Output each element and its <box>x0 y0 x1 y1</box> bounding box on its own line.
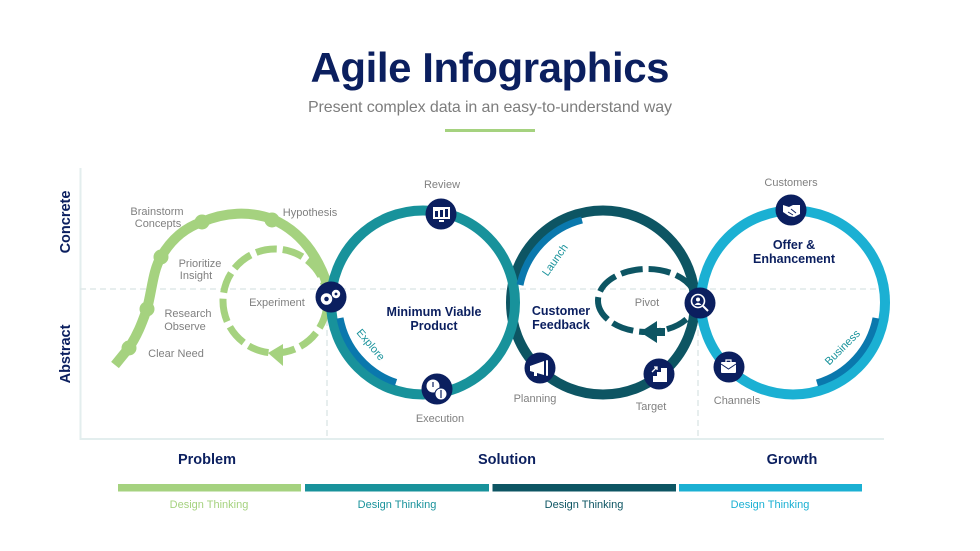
icon: gears <box>316 282 346 312</box>
heading: Minimum Viable Product: Product <box>410 319 458 333</box>
icon: stairs <box>644 358 674 390</box>
legend text: dark: Design Thinking <box>545 499 623 511</box>
label: Prioritize Insight: Prioritize <box>179 258 221 270</box>
chart axes <box>80 168 884 439</box>
legend text: teal: Design Thinking <box>358 499 436 511</box>
label: Target: Target <box>636 401 666 413</box>
icon: magnifier person <box>684 288 716 318</box>
label: Experiment: Experiment <box>249 297 305 309</box>
label: Business: Business <box>823 328 863 368</box>
cyan offer ring <box>701 210 885 394</box>
title underline <box>445 129 535 132</box>
blue arc: business <box>817 318 876 383</box>
label: Clear Need: Clear Need <box>148 348 204 360</box>
icon: handshake <box>776 194 806 226</box>
heading: Customer Feedback: Feedback <box>532 318 590 332</box>
heading: Minimum Viable Product: Minimum Viable <box>387 305 482 319</box>
icon: coins <box>422 374 452 404</box>
legend text: cyan: Design Thinking <box>731 499 809 511</box>
dark customer feedback ring <box>511 210 695 394</box>
label: Prioritize Insight: Insight <box>180 270 212 282</box>
label: Hypothesis: Hypothesis <box>283 207 338 219</box>
green dashed experiment loop with arrow <box>223 249 327 366</box>
heading: Offer and Enhancement: Enhancement <box>753 252 836 266</box>
stage heading: Solution: Solution <box>478 452 536 468</box>
title: Agile Infographics <box>310 44 670 91</box>
label: Execution: Execution <box>416 413 464 425</box>
label: Planning: Planning <box>514 393 556 405</box>
blue arc: launch <box>520 220 582 285</box>
label: Brainstorm Concepts: Concepts <box>135 218 182 230</box>
green problem curve <box>115 212 328 365</box>
label: Research Observe: Observe <box>164 321 206 333</box>
label: Customers: Customers <box>764 177 818 189</box>
legend bar: cyan <box>679 484 862 492</box>
legend text: green: Design Thinking <box>170 499 248 511</box>
heading: Customer Feedback: Customer <box>532 304 590 318</box>
label: Research Observe: Research <box>164 308 212 320</box>
subtitle: Present complex data in an easy-to-understand way <box>308 99 672 116</box>
icon: monitor chart <box>426 198 456 230</box>
legend bar: dark <box>492 484 676 492</box>
label: Explore: Explore <box>354 327 387 363</box>
icon: megaphone <box>524 352 556 384</box>
axis label: Concrete: Concrete <box>58 191 74 253</box>
heading: Offer and Enhancement: Offer & <box>773 238 815 252</box>
teal minimum viable product ring <box>331 210 515 394</box>
icon: briefcase <box>714 352 744 382</box>
legend bar: teal <box>305 484 489 492</box>
dark dashed pivot loop with arrow <box>598 269 696 343</box>
blue arc: explore <box>340 318 396 382</box>
label: Review: Review <box>424 179 460 191</box>
label: Pivot: Pivot <box>635 297 659 309</box>
stage heading: Problem: Problem <box>178 452 236 468</box>
label: Brainstorm Concepts: Brainstorm <box>130 206 184 218</box>
label: Launch: Launch <box>540 242 571 279</box>
stage heading: Growth: Growth <box>767 452 817 468</box>
axis label: Abstract: Abstract <box>58 324 74 383</box>
legend bar: green <box>118 484 301 492</box>
label: Channels: Channels <box>714 395 761 407</box>
